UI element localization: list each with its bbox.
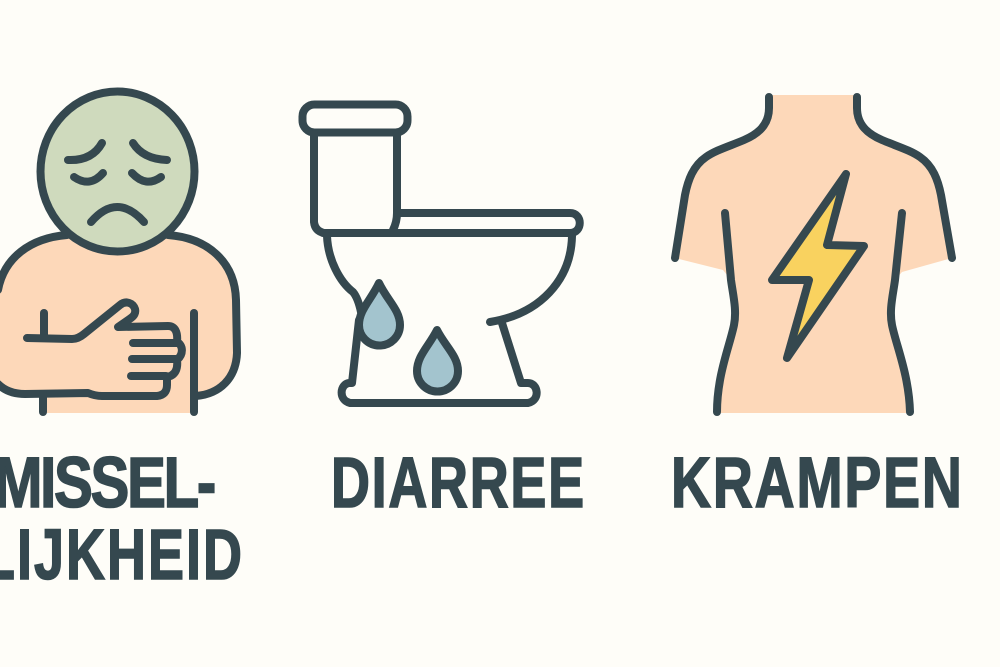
- toilet bowl: [327, 236, 537, 403]
- label: misselijkheid: MISSEL-: [0, 442, 216, 522]
- icon: toilet with drops: [302, 104, 580, 403]
- lightning bolt: [772, 174, 864, 358]
- hand on stomach: [27, 302, 182, 377]
- toilet seat: [323, 213, 580, 233]
- label: diarree: DIARREE: [331, 444, 584, 523]
- toilet tank: [314, 134, 397, 233]
- body outline: [0, 235, 237, 412]
- toilet lid: [302, 104, 408, 132]
- sick face: [40, 92, 194, 252]
- label: misselijkheid: [0, 442, 242, 595]
- torso fill: [675, 95, 952, 413]
- body fill: [0, 235, 237, 413]
- icon: torso with lightning bolt: [675, 95, 952, 413]
- torso outlines: [675, 97, 952, 412]
- water drop 1: [359, 283, 400, 345]
- label: krampen: KRAMPEN: [671, 443, 962, 523]
- icon: nauseous person: [0, 92, 237, 413]
- water drop 2: [417, 330, 458, 392]
